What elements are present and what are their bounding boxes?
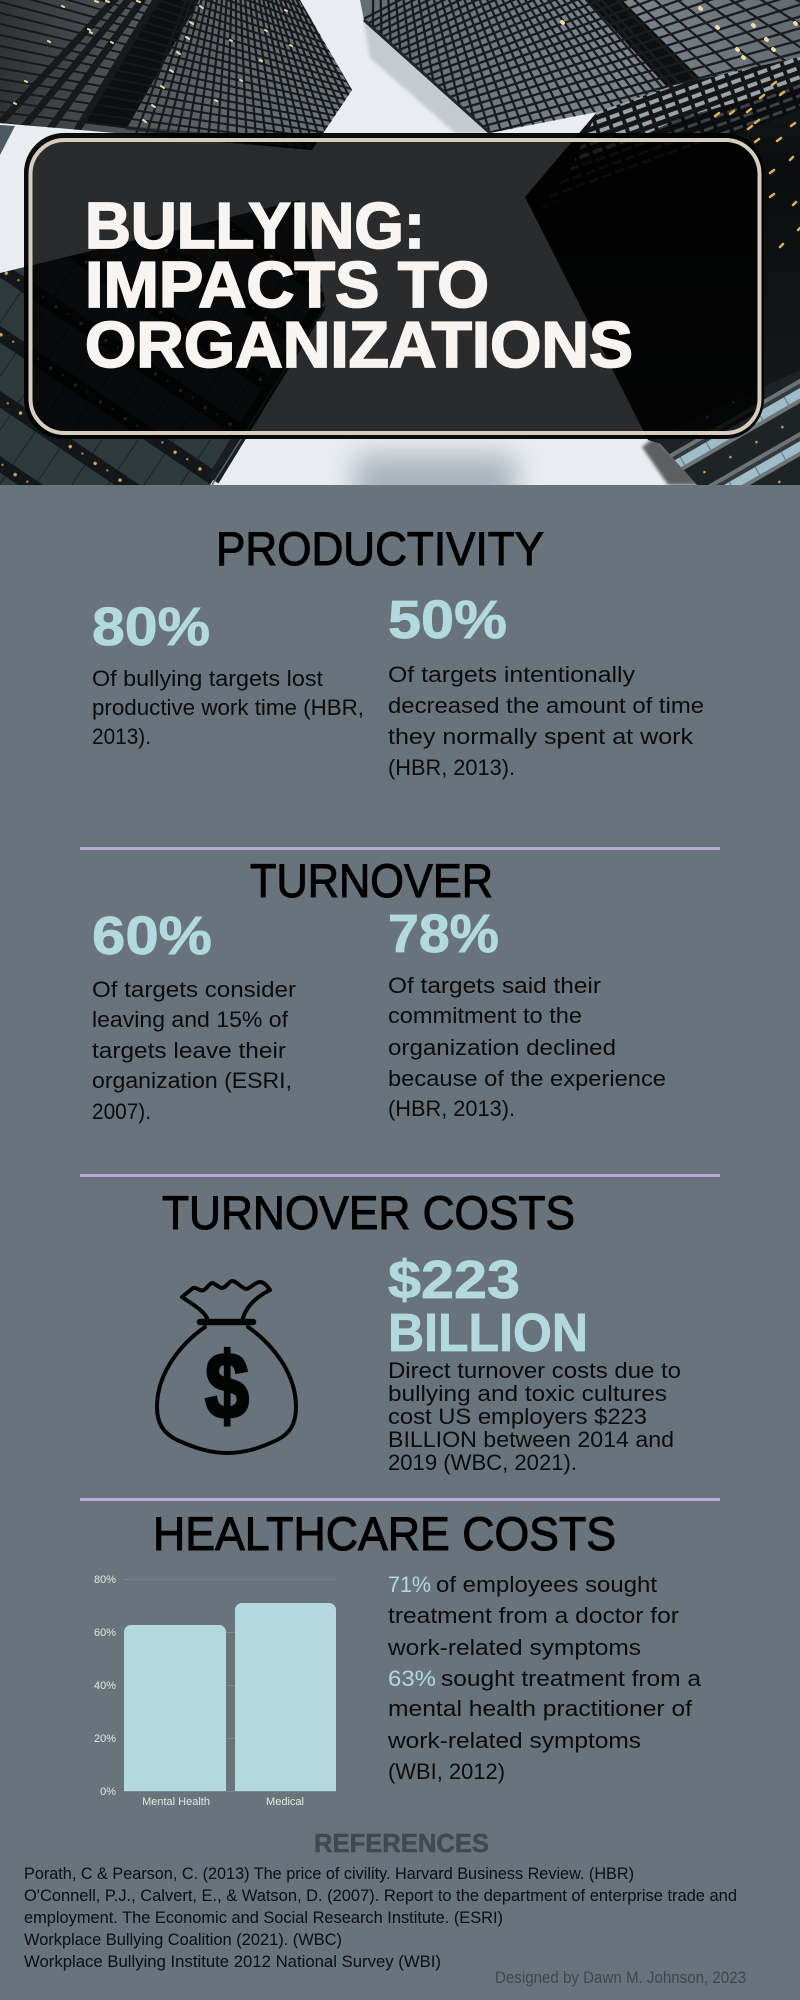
section: references xyxy=(24,1828,746,1987)
reference list: Porath, C & Pearson, C. (2013) The price of civility. Harvard Business Review. (HBR) xyxy=(24,1864,634,1883)
stat: 78%: 78% xyxy=(388,904,499,964)
reference list: Workplace Bullying Coalition (2021). (WBC) xyxy=(24,1930,342,1949)
axis labels: 40% xyxy=(94,1680,116,1692)
bar chart xyxy=(94,1574,336,1808)
icon: dollar sign: $ xyxy=(205,1333,249,1438)
text: 80% description: productive work time (HBR, xyxy=(92,695,364,720)
title text: IMPACTS TO xyxy=(85,248,489,321)
text: 78% description: because of the experience xyxy=(388,1066,666,1091)
text: 60% description: targets leave their xyxy=(92,1038,286,1063)
text: 50% description: Of targets intentionally xyxy=(388,662,635,687)
stat: 80%: 80% xyxy=(92,597,210,657)
text: 78% description: (HBR, 2013). xyxy=(388,1096,515,1121)
stat: $223 billion: $223 xyxy=(388,1250,520,1310)
title text xyxy=(85,189,633,381)
section: turnover costs xyxy=(157,1186,681,1475)
text: healthcare statistics: of employees sought xyxy=(436,1572,657,1597)
text: healthcare statistics: treatment from a doctor for xyxy=(388,1603,679,1628)
text: 60% description xyxy=(92,977,296,1124)
text: turnover cost description xyxy=(388,1358,681,1475)
text: healthcare statistics: (WBI, 2012) xyxy=(388,1759,505,1784)
text: 50% description: decreased the amount of time xyxy=(388,693,704,718)
bar: medical xyxy=(235,1603,336,1791)
reference list xyxy=(24,1864,737,1971)
text: 80% description: Of bullying targets lost xyxy=(92,666,323,691)
stat: 50%: 50% xyxy=(388,590,507,650)
text: 78% description: commitment to the xyxy=(388,1003,582,1028)
text: turnover cost description: 2019 (WBC, 2021). xyxy=(388,1450,577,1475)
axis labels: 20% xyxy=(94,1733,116,1745)
text: turnover cost description: Direct turnover costs due to xyxy=(388,1358,681,1383)
text: healthcare statistics: sought treatment from a xyxy=(441,1666,702,1691)
section: turnover xyxy=(92,854,666,1124)
stat: 60%: 60% xyxy=(92,906,212,966)
text: 78% description: organization declined xyxy=(388,1035,616,1060)
category labels: Mental Health xyxy=(142,1796,210,1808)
text: 50% description xyxy=(388,662,704,780)
heading: turnover costs: TURNOVER COSTS xyxy=(162,1186,575,1239)
text: 80% description: 2013). xyxy=(92,724,151,749)
text: 50% description: they normally spent at work xyxy=(388,724,694,749)
text: 60% description: Of targets consider xyxy=(92,977,296,1002)
building with gold lights xyxy=(525,57,800,485)
text: healthcare statistics xyxy=(387,1572,702,1784)
axis labels: 60% xyxy=(94,1627,116,1639)
icon: money bag xyxy=(157,1281,296,1453)
text: 80% description xyxy=(92,666,364,749)
reference list: Workplace Bullying Institute 2012 National Survey (WBI) xyxy=(24,1952,441,1971)
header photo: skyscrapers xyxy=(0,0,800,515)
text: turnover cost description: BILLION between 2014 and xyxy=(388,1427,674,1452)
text: healthcare statistics: 63% xyxy=(388,1666,436,1691)
reference list: employment. The Economic and Social Research Institute. (ESRI) xyxy=(24,1908,503,1927)
text: healthcare statistics: work-related symptoms xyxy=(387,1635,641,1660)
section: productivity xyxy=(92,522,704,780)
text: 60% description: organization (ESRI, xyxy=(92,1068,292,1093)
category labels: Medical xyxy=(266,1796,304,1808)
axis labels xyxy=(94,1574,116,1798)
heading: productivity: PRODUCTIVITY xyxy=(216,522,544,575)
bar: mental health xyxy=(124,1625,226,1791)
text: turnover cost description: bullying and toxic cultures xyxy=(388,1381,667,1406)
title text: BULLYING: xyxy=(85,189,425,262)
text: 78% description xyxy=(388,973,666,1121)
heading: turnover: TURNOVER xyxy=(250,854,493,907)
text: healthcare statistics: work-related symptoms xyxy=(387,1728,641,1753)
text: 60% description: leaving and 15% of xyxy=(92,1007,289,1032)
heading: healthcare costs: HEALTHCARE COSTS xyxy=(153,1507,616,1560)
title panel xyxy=(24,133,764,439)
text: turnover cost description: cost US employers $223 xyxy=(388,1404,647,1429)
text: healthcare statistics: mental health practitioner of xyxy=(388,1696,693,1721)
text: 60% description: 2007). xyxy=(92,1099,151,1124)
title text: ORGANIZATIONS xyxy=(85,308,633,381)
axis labels: 0% xyxy=(100,1786,116,1798)
axis labels: 80% xyxy=(94,1574,116,1586)
section: healthcare costs xyxy=(94,1507,702,1808)
text: 78% description: Of targets said their xyxy=(388,973,601,998)
stat: $223 billion: BILLION xyxy=(388,1303,588,1363)
text: 50% description: (HBR, 2013). xyxy=(388,755,515,780)
text: healthcare statistics: 71% xyxy=(388,1572,431,1597)
stat: $223 billion xyxy=(388,1250,588,1363)
heading: references: REFERENCES xyxy=(314,1828,489,1858)
category labels xyxy=(142,1796,304,1808)
credit: Designed by Dawn M. Johnson, 2023 xyxy=(495,1969,746,1987)
reference list: O'Connell, P.J., Calvert, E., & Watson, D. (2007). Report to the department of enterprise trade and xyxy=(24,1886,737,1905)
